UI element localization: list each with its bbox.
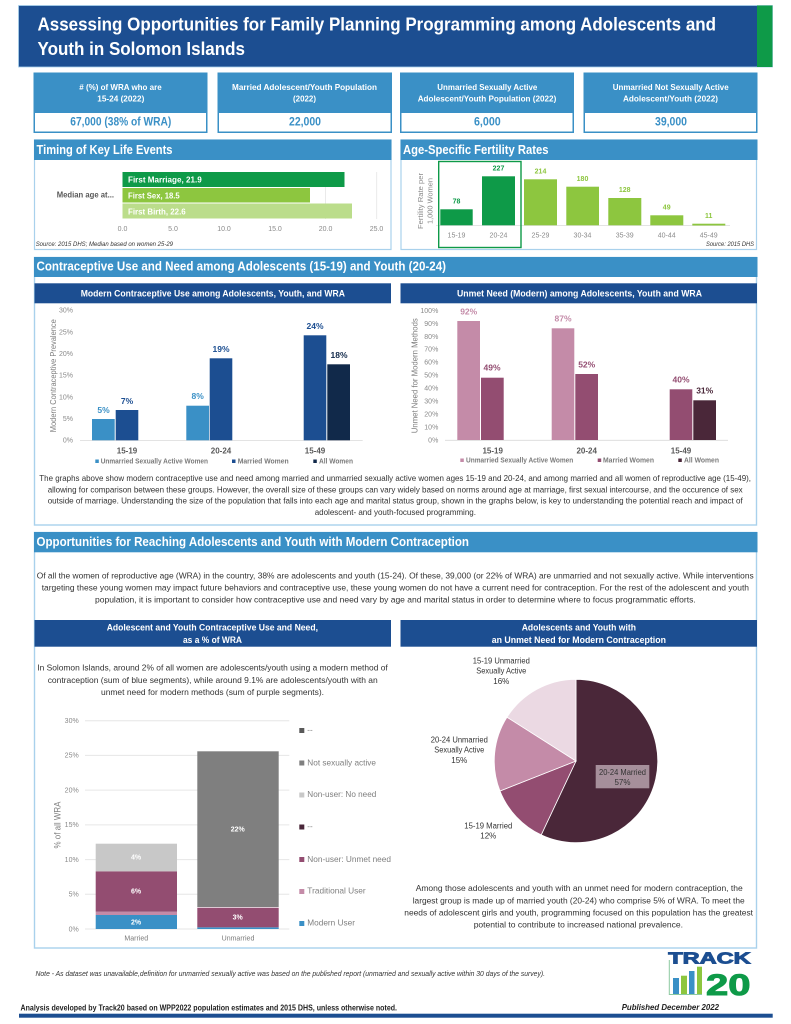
pie chart: unmet need by group: 57% (614, 778, 631, 787)
text block: pie chart summary: potential to contribute to increased national prevalence. (474, 920, 683, 930)
bar chart: fertility rates: 45-49 (700, 232, 718, 239)
chart: modern contraceptive use: 8% (192, 391, 204, 401)
chart: modern contraceptive use: 5% (63, 416, 73, 423)
stat card: WRA 15-24 (34, 72, 208, 133)
heading: use and need as % of WRA: as a % of WRA (183, 635, 242, 645)
chart: unmet need: 100% (420, 308, 438, 315)
chart: unmet need: 31% (696, 386, 714, 396)
chart: unmet need: 80% (424, 334, 438, 341)
logo: Track20 (668, 950, 751, 1002)
stacked bar chart: % of all WRA: Married (124, 935, 148, 942)
text block: graph explanation (39, 473, 751, 517)
legend: modern contraceptive use: Married Women (238, 456, 289, 465)
text block: opportunities intro: Of all the women of reproductive age (WRA) in the country, 38% are adolescents and youth (15-24). Of these, 39,000 (or 22% of WRA) are unmarried and not sexually active. While interventions (37, 571, 754, 581)
stat card: married population: 22,000 (289, 115, 321, 129)
panel: timing of key life events (34, 140, 392, 250)
text block: opportunities intro (37, 571, 754, 605)
stat card: unmarried not sexually active: Unmarried Not Sexually Active (613, 82, 729, 92)
bar chart: median age: Median age at... (57, 189, 114, 199)
chart: unmet need: Unmet Need for Modern Methods (410, 318, 420, 433)
pie chart: unmet need by group: 15% (451, 756, 467, 765)
text block: pie chart summary: needs of adolescent girls and youth, programming focused on this population has the greatest (404, 908, 754, 918)
stacked bar chart: % of all WRA: 0% (69, 926, 79, 933)
text block: stacked chart summary: contraception (sum of blue segments), while around 9.1% are adolescents/youth with an (48, 675, 378, 685)
legend: stacked chart: -- (307, 822, 313, 831)
panel: contraceptive use and need (34, 257, 758, 525)
stacked bar chart: % of all WRA: 10% (65, 857, 79, 864)
bar chart: median age: First Birth, 22.6 (128, 207, 186, 217)
stat card: WRA 15-24: # (%) of WRA who are (79, 82, 162, 92)
chart: modern contraceptive use: 18% (330, 350, 348, 360)
heading: unmet need for modern contraception: Adolescents and Youth with (522, 622, 636, 632)
legend: stacked chart: Traditional User (307, 886, 366, 896)
chart: unmet need: 40% (672, 375, 690, 385)
chart: modern contraceptive use: 20% (59, 351, 73, 358)
chart: unmet need: 49% (483, 363, 501, 373)
chart: unmet need: 52% (578, 359, 596, 369)
text block: pie chart summary: Among those adolescents and youth with an unmet need for modern contraception, the (416, 883, 743, 893)
title banner: Youth in Solomon Islands (38, 38, 245, 59)
stacked bar chart: % of all WRA: 4% (131, 855, 142, 862)
chart: unmet need: 15-19 (482, 446, 503, 455)
bar chart: median age: 0.0 (118, 226, 127, 233)
bar chart: fertility rates: 214 (535, 168, 546, 176)
bar chart: fertility rates: 180 (577, 176, 588, 183)
chart: modern contraceptive use: 0% (63, 438, 73, 445)
chart: unmet need: 70% (424, 347, 438, 354)
stat card: WRA 15-24: 67,000 (38% of WRA) (70, 115, 171, 129)
highlight box: ages 15-24 (439, 162, 521, 248)
legend: modern contraceptive use: All Women (319, 456, 353, 465)
bar chart: fertility rates: 1,000 Women (426, 178, 434, 224)
stacked bar chart: % of all WRA: 22% (231, 827, 245, 834)
chart: unmet need: 50% (424, 373, 438, 380)
pie chart: unmet need by group: Sexually Active (476, 667, 527, 676)
legend: stacked chart: Not sexually active (307, 757, 376, 767)
footer: publication date: Published December 2022 (622, 1002, 719, 1012)
bar chart: fertility rates: 11 (705, 213, 713, 220)
text block: stacked chart summary: In Solomon Islands, around 2% of all women are adolescents/youth using a modern method of (37, 663, 388, 673)
chart: unmet need: 20-24 (576, 446, 597, 455)
title banner: Assessing Opportunities for Family Planning Programming among Adolescents and (38, 14, 716, 34)
bar chart: fertility rates (416, 166, 730, 239)
bar chart: median age: 25.0 (370, 226, 383, 233)
chart: unmet need: 90% (424, 321, 438, 328)
legend: unmet need (460, 455, 719, 464)
text block: opportunities intro: targeting these young women may impact future behaviors and contraceptive use, these young women do not have a current need for contraception. For the rest of the adolescent and youth (42, 583, 749, 593)
legend: stacked chart: -- (307, 726, 313, 734)
heading: use and need as % of WRA (34, 620, 391, 647)
panel: age-specific fertility rates: Age-Specific Fertility Rates (403, 142, 548, 157)
chart: unmet need: 10% (424, 424, 438, 432)
legend: stacked chart: Non-user: Unmet need (307, 854, 391, 864)
text block: opportunities intro: population, it is important to consider how contraceptive use and need vary by age and marital status in order to determine where to focus programmatic efforts. (95, 595, 696, 605)
pie chart: unmet need by group: 20-24 Unmarried (431, 735, 488, 744)
stat card: unmarried sexually active population: Adolescent/Youth Population (2022) (418, 94, 556, 104)
legend: unmet need: All Women (684, 455, 719, 464)
stacked bar chart: % of all WRA (53, 718, 391, 942)
pie chart: unmet need by group: Sexually Active (434, 746, 485, 755)
heading: unmet need for modern contraception (400, 620, 757, 647)
panel: age-specific fertility rates (400, 140, 758, 250)
legend: stacked chart (299, 726, 391, 928)
stat card: unmarried not sexually active: Adolescent/Youth (2022) (623, 94, 718, 104)
stat card: WRA 15-24: 15-24 (2022) (97, 94, 144, 104)
panel: contraceptive use and need: Contraceptive Use and Need among Adolescents (15-19) and Youth (20-24) (36, 259, 446, 274)
text block: graph explanation: allowing for comparison between these groups. However, the overall size of these groups can vary widely based on norms around age at marriage, first sexual intercourse, and the occurence of sex (48, 484, 743, 494)
text block: graph explanation: outside of marriage. Understanding the size of the population that falls into each age and marital status group, shown in the graphs below, is key to understanding the potential reach and impact of (48, 496, 743, 506)
logo: Track20: TRACK (668, 950, 751, 967)
chart: unmet need: 92% (460, 306, 478, 316)
legend: unmet need: Unmarried Sexually Active Women (466, 455, 574, 464)
chart: unmet need: 0% (428, 438, 438, 444)
pie chart: unmet need by group: 15-19 Unmarried (473, 656, 530, 665)
text block: graph explanation: adolescent- and youth-focused programming. (315, 507, 476, 517)
stacked bar chart: % of all WRA: Unmarried (222, 935, 254, 942)
title banner (18, 6, 772, 67)
stat card: married population (218, 72, 392, 133)
chart: modern contraceptive use (34, 283, 391, 465)
bar chart: median age: 10.0 (217, 226, 231, 233)
legend: stacked chart: Modern User (307, 918, 355, 928)
legend: modern contraceptive use: Unmarried Sexually Active Women (101, 456, 208, 465)
stacked bar chart: % of all WRA: 25% (65, 753, 79, 760)
panel: age-specific fertility rates: Source: 2015 DHS (706, 242, 754, 248)
bar chart: fertility rates: 35-39 (616, 232, 634, 239)
chart: unmet need: 15-49 (671, 446, 692, 455)
bar chart: fertility rates: 49 (663, 204, 671, 212)
stat card: married population: Married Adolescent/Youth Population (232, 82, 377, 92)
stat card: unmarried sexually active population (400, 72, 574, 133)
logo: Track20: 20 (706, 969, 750, 1002)
chart: unmet need: Unmet Need (Modern) among Adolescents, Youth and WRA (457, 288, 702, 298)
note: Note - As dataset was unavailable,definition for unmarried sexually active was based on the published report (unmarried and sexually active within 30 days of the survey). (36, 971, 545, 978)
stat card: unmarried not sexually active: 39,000 (655, 115, 687, 129)
text block: pie chart summary (404, 883, 754, 930)
stacked bar chart: % of all WRA: 20% (65, 787, 79, 794)
chart: modern contraceptive use: 25% (59, 329, 73, 336)
stacked bar chart: % of all WRA: 30% (65, 718, 79, 725)
bar chart: median age: 20.0 (319, 226, 333, 233)
text block: stacked chart summary: unmet need for modern methods (sum of purple segments). (101, 687, 324, 697)
bar chart: fertility rates: 128 (619, 187, 631, 194)
stat card: married population: (2022) (293, 94, 316, 104)
stacked bar chart: % of all WRA: 15% (65, 822, 79, 829)
chart: modern contraceptive use: 24% (306, 321, 324, 331)
heading: unmet need for modern contraception: an Unmet Need for Modern Contraception (492, 635, 666, 645)
stacked bar chart: % of all WRA: 5% (69, 892, 79, 899)
footer: analysis credit: Analysis developed by Track20 based on WPP2022 population estimates and 2015 DHS, unless otherwise noted. (20, 1003, 397, 1013)
pie chart: unmet need by group: 15-19 Married (464, 821, 512, 830)
panel: timing of key life events: Timing of Key Life Events (36, 142, 172, 157)
chart: modern contraceptive use: Modern Contraceptive Prevalence (48, 319, 58, 432)
chart: modern contraceptive use: 10% (59, 394, 73, 401)
bar chart: fertility rates: 15-19 (448, 232, 466, 239)
pie chart: unmet need by group: 16% (493, 677, 509, 686)
heading: use and need as % of WRA: Adolescent and Youth Contraceptive Use and Need, (107, 622, 318, 632)
stacked bar chart: % of all WRA: 2% (131, 919, 142, 926)
text block: stacked chart summary (37, 663, 388, 697)
bar chart: fertility rates: 25-29 (532, 232, 550, 239)
chart: modern contraceptive use: 19% (212, 344, 230, 354)
chart: unmet need: 30% (424, 399, 438, 406)
bar chart: median age (57, 172, 383, 233)
bar chart: median age: First Sex, 18.5 (128, 191, 180, 201)
chart: unmet need: 87% (554, 313, 572, 323)
legend: modern contraceptive use (95, 456, 353, 465)
chart: modern contraceptive use: 15-19 (117, 447, 138, 456)
bar chart: fertility rates: 227 (493, 166, 504, 172)
chart: modern contraceptive use: 15-49 (305, 447, 326, 456)
text block: pie chart summary: largest group is made up of married youth (20-24) who comprise 5% of WRA. To meet the (413, 895, 745, 905)
panel: opportunities for reaching adolescents and youth (34, 532, 758, 948)
chart: unmet need: 20% (424, 412, 438, 419)
bar chart: fertility rates: Fertility Rate per (416, 173, 425, 229)
pie chart: unmet need by group (431, 656, 658, 843)
panel: opportunities for reaching adolescents and youth: Opportunities for Reaching Adolescents and Youth with Modern Contraception (36, 534, 469, 549)
bar chart: fertility rates: 40-44 (658, 232, 676, 239)
stat card: unmarried not sexually active (584, 72, 758, 133)
chart: modern contraceptive use: 5% (97, 405, 110, 415)
chart: modern contraceptive use: 15% (59, 373, 73, 380)
chart: unmet need: 60% (424, 360, 438, 367)
chart: unmet need (400, 283, 757, 464)
panel: timing of key life events: Source: 2015 DHS; Median based on women 25-29 (36, 242, 174, 248)
legend: unmet need: Married Women (603, 455, 654, 464)
bar chart: median age: First Marriage, 21.9 (128, 175, 202, 185)
stat card: unmarried sexually active population: 6,000 (474, 115, 501, 129)
chart: modern contraceptive use: 30% (59, 308, 73, 315)
chart: unmet need: 40% (424, 386, 438, 393)
stacked bar chart: % of all WRA: 3% (233, 915, 244, 922)
bar chart: median age: 15.0 (268, 226, 282, 233)
stat card: unmarried sexually active population: Unmarried Sexually Active (437, 82, 538, 92)
stacked bar chart: % of all WRA: % of all WRA (53, 802, 63, 848)
bar chart: fertility rates: 30-34 (574, 232, 592, 239)
legend: stacked chart: Non-user: No need (307, 789, 377, 799)
chart: modern contraceptive use: Modern Contraceptive Use among Adolescents, Youth, and WRA (81, 288, 345, 298)
chart: modern contraceptive use: 7% (121, 396, 134, 406)
chart: modern contraceptive use: 20-24 (211, 447, 232, 456)
bar chart: median age: 5.0 (168, 226, 178, 233)
pie chart: unmet need by group: 20-24 Married (599, 768, 646, 777)
pie chart: unmet need by group: 12% (480, 832, 496, 841)
bar chart: fertility rates: 78 (453, 198, 460, 206)
stacked bar chart: % of all WRA: 6% (131, 889, 142, 896)
bar chart: fertility rates: 20-24 (490, 232, 508, 239)
